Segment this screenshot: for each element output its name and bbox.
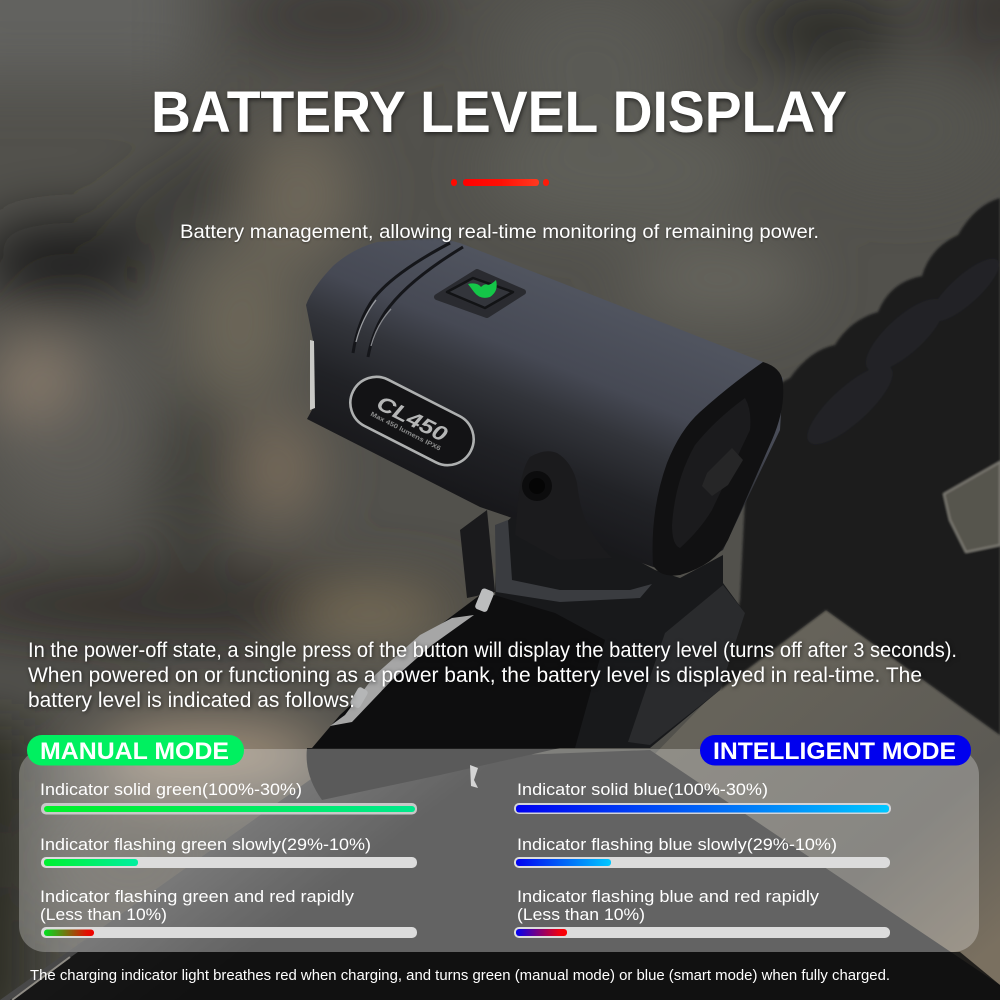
intelligent: flashing blue row <box>514 835 890 868</box>
description paragraph: In the power-off state, a single press of the button will display the battery level (turns off after 3 seconds). <box>28 639 957 662</box>
light mount and clamp <box>312 510 745 748</box>
stem and lower bike frame <box>0 748 1000 1000</box>
light: left edge highlight <box>310 340 315 410</box>
intelligent: blue and red row <box>514 887 890 938</box>
intelligent: solid blue row: Indicator solid blue(100%-30%) <box>517 780 768 799</box>
manual: green and red row: (Less than 10%) <box>40 905 167 924</box>
badge: CL450 model plate: Max 450 lumens IPX6 <box>369 411 442 453</box>
manual: green and red row <box>40 887 417 938</box>
mount: upper clamp screw <box>474 588 495 613</box>
badge: intelligent mode: INTELLIGENT MODE <box>713 738 956 765</box>
manual: solid green row <box>40 780 417 814</box>
light: hinge bolt <box>515 451 612 560</box>
badge: CL450 model plate: CL450 <box>373 392 451 447</box>
handlebar grip <box>720 198 1000 735</box>
mount: bright clamp sliver <box>330 615 474 726</box>
mount: lower clamp screw <box>349 686 369 709</box>
description paragraph <box>28 639 957 712</box>
red divider <box>451 179 549 186</box>
manual: solid green row: Indicator solid green(100%-30%) <box>40 780 302 799</box>
light: front lens cap <box>653 362 783 576</box>
badge: manual mode: MANUAL MODE <box>40 738 229 765</box>
manual: flashing green row <box>40 835 417 868</box>
manual: green and red row: Indicator flashing green and red rapidly <box>40 887 355 906</box>
panel: battery indicator modes <box>19 749 979 952</box>
subtitle: Battery management, allowing real-time monitoring of remaining power. <box>180 221 819 243</box>
intelligent: solid blue row <box>514 780 891 814</box>
icon: power button with green flame <box>437 272 523 315</box>
manual: flashing green row: Indicator flashing green slowly(29%-10%) <box>40 835 371 854</box>
background tan wedge <box>652 610 1000 995</box>
title: BATTERY LEVEL DISPLAY <box>151 80 847 145</box>
intelligent: blue and red row: Indicator flashing blue and red rapidly <box>517 887 820 906</box>
description paragraph: When powered on or functioning as a power bank, the battery level is displayed in real-time. The <box>28 664 922 687</box>
light: body seam lines <box>353 243 463 357</box>
intelligent: flashing blue row: Indicator flashing blue slowly(29%-10%) <box>517 835 837 854</box>
badge: CL450 model plate <box>341 368 483 474</box>
bike light body <box>306 238 783 576</box>
footer charging note: The charging indicator light breathes red when charging, and turns green (manual mode) or blue (smart mode) when fully charged. <box>30 968 890 984</box>
description paragraph: battery level is indicated as follows: <box>28 689 355 712</box>
intelligent: blue and red row: (Less than 10%) <box>517 905 645 924</box>
